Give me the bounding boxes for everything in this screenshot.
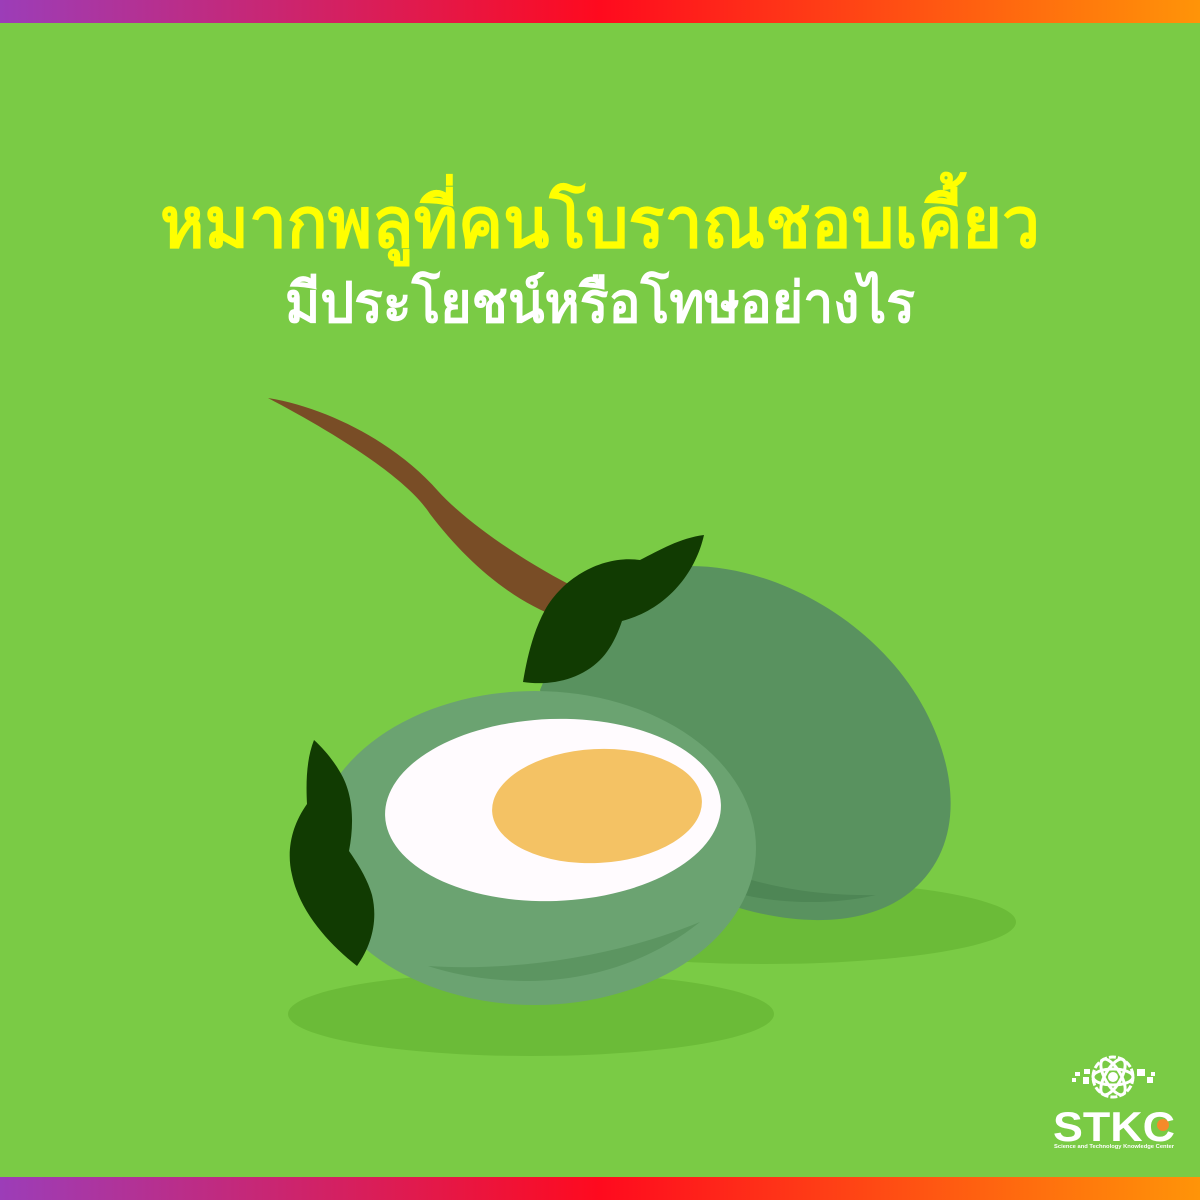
logo orange dot	[1157, 1119, 1169, 1131]
nut underside shade	[428, 922, 700, 981]
cut areca nut	[314, 691, 756, 1005]
title: หมากพลูที่คนโบราณชอบเคี้ยว	[160, 171, 1040, 267]
logo atom icon	[1093, 1056, 1133, 1098]
bottom gradient bar	[0, 1177, 1200, 1200]
top gradient bar	[0, 0, 1200, 23]
seed	[489, 744, 705, 868]
whole areca nut	[540, 566, 951, 920]
nut underside shade	[725, 875, 876, 902]
leaves on cut nut	[290, 740, 374, 966]
logo wordmark: STKC	[1053, 1103, 1175, 1150]
subtitle: มีประโยชน์หรือโทษอย่างไร	[285, 270, 915, 334]
stem	[268, 398, 580, 618]
shadow: front areca nut	[288, 972, 774, 1056]
shadow: back areca nut	[514, 880, 1016, 964]
STKC logo	[1053, 1056, 1175, 1150]
leaves on whole nut	[523, 535, 704, 683]
logo tagline: Science and Technology Knowledge Center	[1054, 1144, 1175, 1150]
logo pixel dots	[1072, 1069, 1155, 1084]
white flesh	[382, 713, 724, 907]
